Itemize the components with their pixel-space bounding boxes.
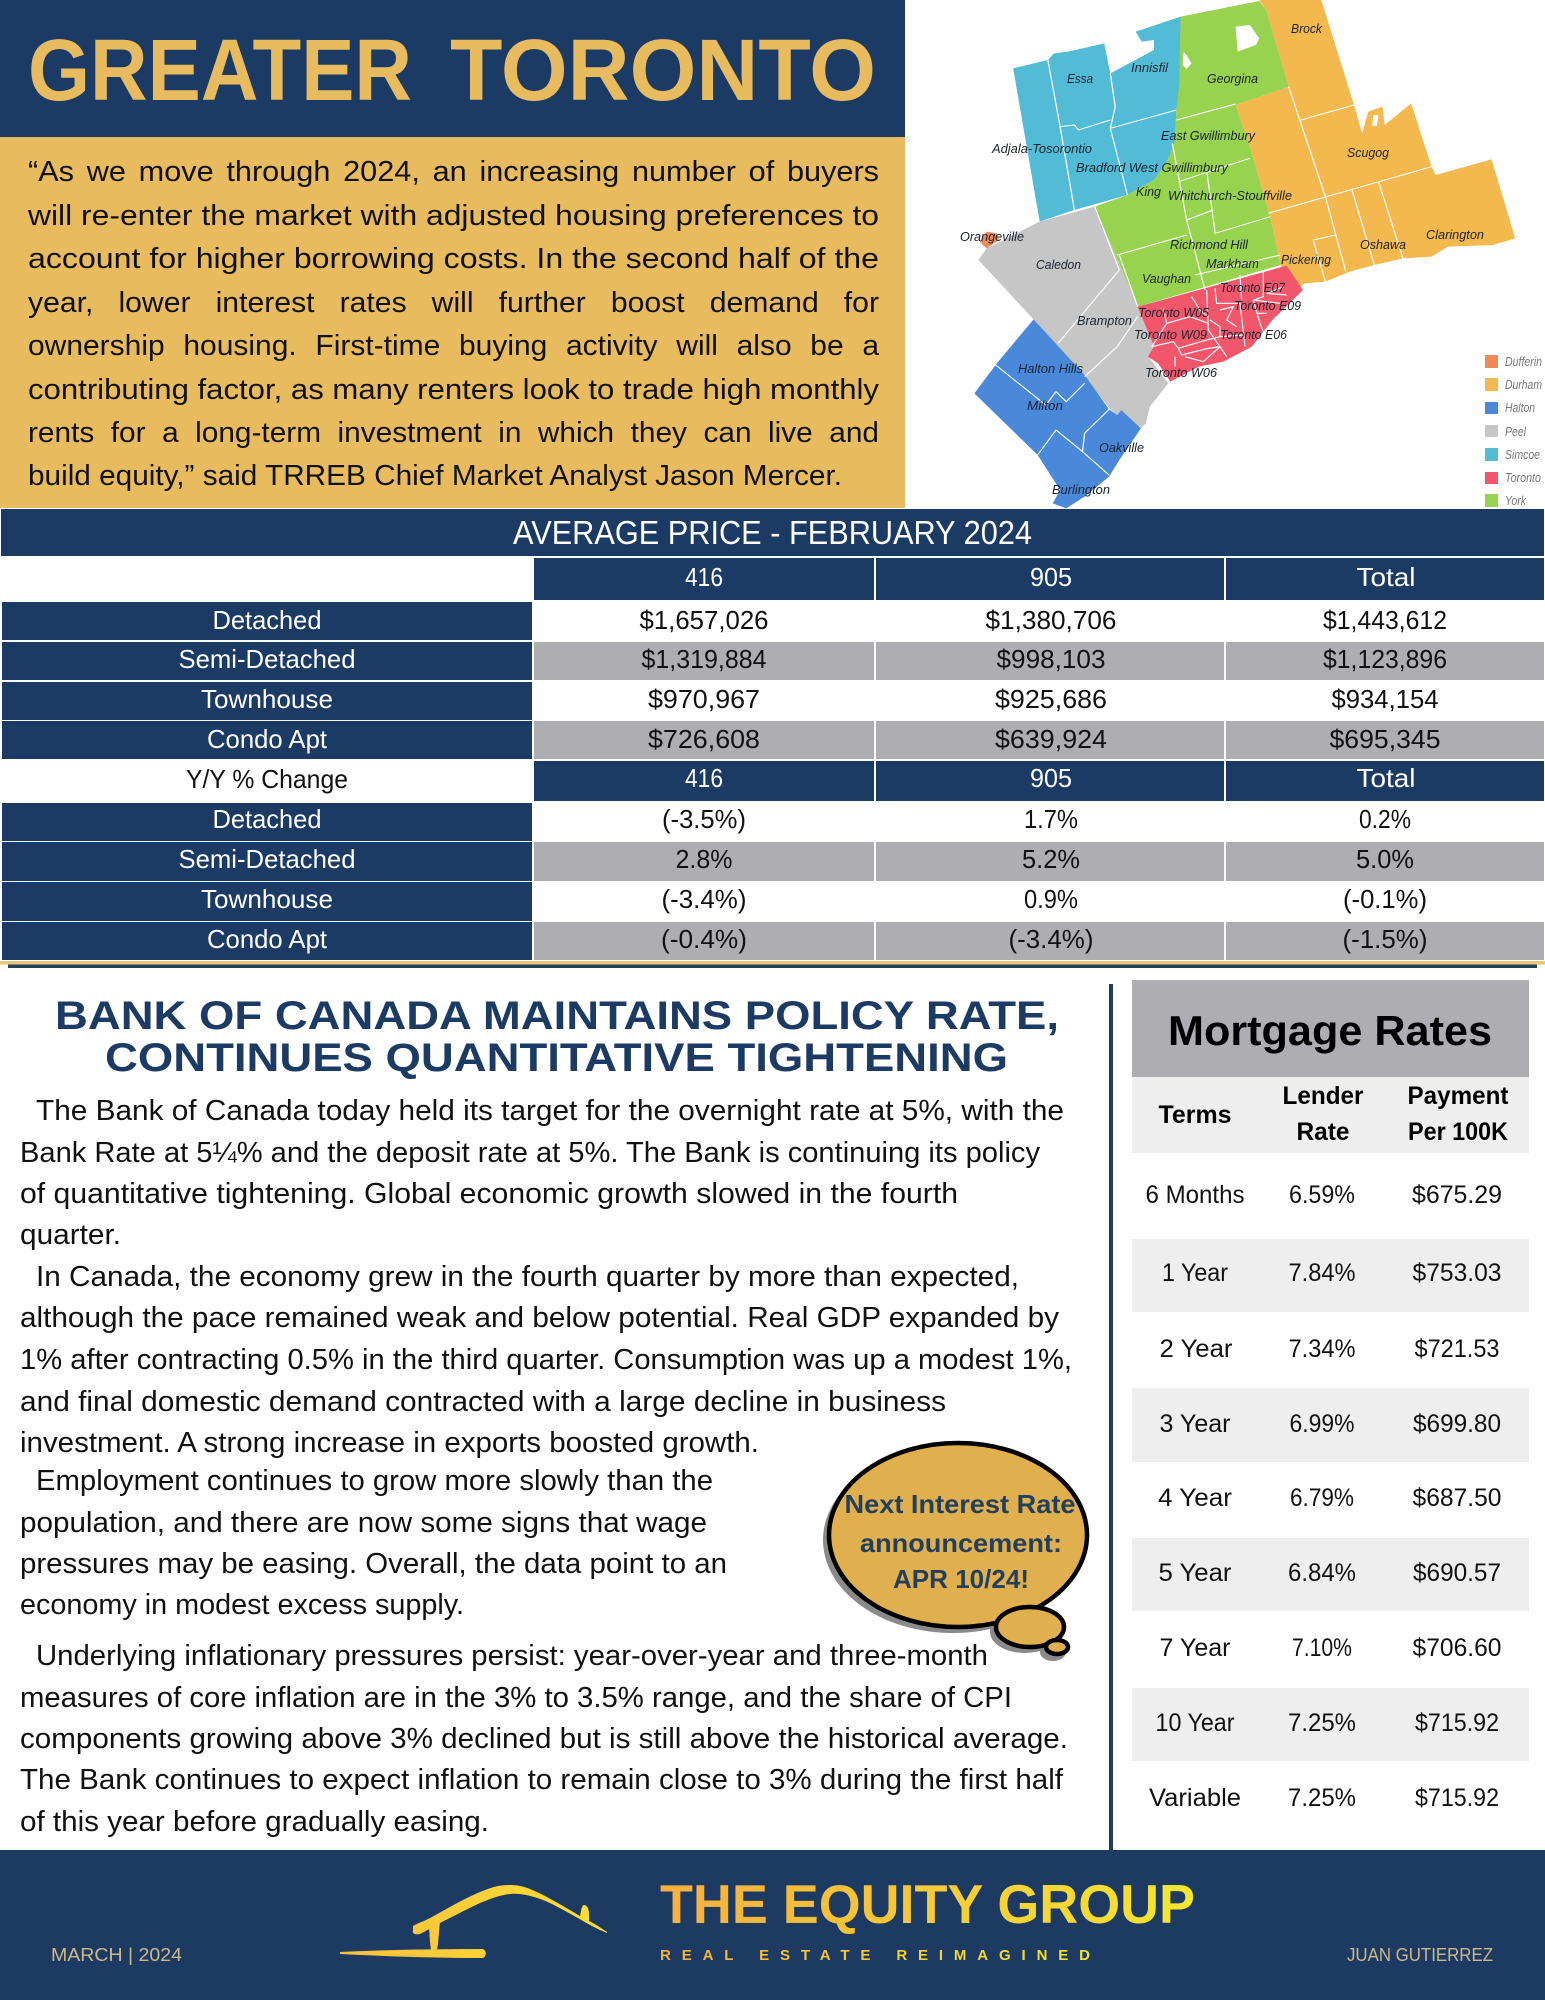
text block: Bank of Canada article: Bank Rate at 5¼% and the deposit rate at 5%. The Bank is continuing its policy bbox=[20, 1137, 1040, 1169]
price rows: $639,924 bbox=[995, 724, 1107, 754]
map: GTA regions: Pickering bbox=[1281, 252, 1332, 267]
text block: Bank of Canada article: Employment continues to grow more slowly than the bbox=[36, 1465, 713, 1497]
price rows: $1,123,896 bbox=[1323, 644, 1447, 674]
panel: market analyst quote: year, lower interest rates will further boost demand for bbox=[28, 287, 879, 319]
mortgage rate rows: 6.59% bbox=[1289, 1181, 1355, 1209]
year over year rows: 0.2% bbox=[1359, 804, 1411, 834]
mortgage rate rows: $706.60 bbox=[1412, 1634, 1502, 1662]
map: GTA regions bbox=[960, 0, 1515, 508]
callout: next interest rate announcement: APR 10/24! bbox=[893, 1564, 1029, 1594]
mortgage rate rows: $753.03 bbox=[1412, 1259, 1502, 1287]
map: GTA regions: Toronto E07 bbox=[1220, 280, 1286, 295]
panel: market analyst quote: account for higher borrowing costs. In the second half of the bbox=[28, 243, 879, 275]
map: GTA regions: East Gwillimbury bbox=[1161, 128, 1256, 143]
year over year rows: 1.7% bbox=[1024, 804, 1078, 834]
text block: Bank of Canada article: and final domestic demand contracted with a large decline in business bbox=[20, 1386, 946, 1418]
mortgage rate rows: 6 Months bbox=[1146, 1181, 1244, 1209]
map legend: Halton bbox=[1505, 400, 1535, 415]
map legend: Peel bbox=[1505, 424, 1527, 439]
year over year rows: (-3.5%) bbox=[662, 804, 746, 834]
map: GTA regions: Caledon bbox=[1036, 257, 1081, 272]
icon: equity group house logo bbox=[340, 1885, 607, 1958]
price rows: $998,103 bbox=[996, 644, 1106, 674]
mortgage rate rows: 6.79% bbox=[1290, 1484, 1354, 1512]
table title bbox=[1, 509, 1544, 556]
heading: Bank of Canada bbox=[55, 994, 1059, 1080]
map legend: York bbox=[1505, 493, 1527, 508]
text block: Bank of Canada article: of this year before gradually easing. bbox=[20, 1806, 489, 1838]
year over year rows: 5.2% bbox=[1022, 844, 1080, 874]
text block: Bank of Canada article: Underlying inflationary pressures persist: year-over-year and three-month bbox=[36, 1640, 988, 1672]
column headers: year over year: 416 bbox=[685, 763, 723, 793]
map: GTA regions: Brampton bbox=[1077, 313, 1132, 328]
map: GTA regions: Burlington bbox=[1052, 482, 1110, 497]
text block: Bank of Canada article: measures of core inflation are in the 3% to 3.5% range, and the share of CPI bbox=[20, 1682, 1012, 1714]
mortgage rate rows: 7 Year bbox=[1160, 1634, 1230, 1662]
price rows: $695,345 bbox=[1330, 724, 1440, 754]
text block: Bank of Canada article: pressures may be easing. Overall, the data point to an bbox=[20, 1548, 727, 1580]
mortgage rate rows: $675.29 bbox=[1412, 1181, 1502, 1209]
year over year rows bbox=[2, 803, 1544, 960]
year over year rows: Condo Apt bbox=[207, 924, 328, 954]
year over year rows: (-0.4%) bbox=[661, 924, 747, 954]
column headers: year over year: 905 bbox=[1030, 763, 1072, 793]
text block: Bank of Canada article: In Canada, the economy grew in the fourth quarter by more than expected, bbox=[36, 1261, 1019, 1293]
year over year rows: Townhouse bbox=[201, 884, 333, 914]
mortgage rate rows: 7.34% bbox=[1288, 1335, 1356, 1363]
year over year rows: (-1.5%) bbox=[1342, 924, 1428, 954]
price rows bbox=[2, 602, 1544, 759]
panel: market analyst quote: ownership housing. First-time buying activity will also be a bbox=[28, 330, 880, 362]
heading: Bank of Canada: BANK OF CANADA MAINTAINS POLICY RATE, bbox=[55, 994, 1059, 1038]
year over year rows: 5.0% bbox=[1356, 844, 1414, 874]
column headers: year over year: Y/Y % Change bbox=[186, 764, 348, 794]
panel: market analyst quote: build equity,” said TRREB Chief Market Analyst Jason Mercer. bbox=[28, 460, 842, 492]
map: GTA regions: Adjala-Tosorontio bbox=[991, 141, 1092, 156]
map: GTA regions: Richmond Hill bbox=[1170, 237, 1249, 252]
map: GTA regions: Bradford West Gwillimbury bbox=[1076, 160, 1229, 175]
column headers: year over year: Total bbox=[1356, 763, 1416, 793]
mortgage column headers bbox=[1132, 1077, 1529, 1153]
text block: Bank of Canada article: 1% after contracting 0.5% in the third quarter. Consumption was up a modest 1%, bbox=[20, 1344, 1072, 1376]
mortgage column headers: Lender bbox=[1282, 1082, 1364, 1110]
mortgage rate rows: 7.25% bbox=[1288, 1784, 1356, 1812]
map: GTA regions: Clarington bbox=[1426, 227, 1484, 242]
column headers: price bbox=[534, 558, 1544, 600]
mortgage rate rows: $721.53 bbox=[1414, 1335, 1500, 1363]
column headers: year over year bbox=[186, 761, 1544, 801]
company name: THE EQUITY GROUP bbox=[660, 1873, 1195, 1935]
mortgage column headers: Rate bbox=[1296, 1118, 1350, 1146]
mortgage rate rows: $690.57 bbox=[1413, 1559, 1501, 1587]
map: GTA regions: Toronto E06 bbox=[1220, 327, 1288, 342]
map legend bbox=[1485, 354, 1542, 508]
mortgage rate rows: 6.99% bbox=[1290, 1410, 1354, 1438]
mortgage rate rows: 5 Year bbox=[1158, 1559, 1232, 1587]
map: GTA regions: Milton bbox=[1027, 398, 1063, 413]
map: GTA regions: Toronto W06 bbox=[1145, 365, 1218, 380]
price rows: Semi-Detached bbox=[178, 644, 356, 674]
price rows: $934,154 bbox=[1332, 684, 1438, 714]
year over year rows: 2.8% bbox=[676, 844, 732, 874]
text block: Bank of Canada article: population, and there are now some signs that wage bbox=[20, 1507, 707, 1539]
mortgage column headers: Terms bbox=[1158, 1101, 1232, 1129]
year over year rows: Semi-Detached bbox=[178, 844, 356, 874]
footer author: JUAN GUTIERREZ bbox=[1347, 1945, 1493, 1965]
price rows: Detached bbox=[212, 605, 322, 635]
text block: Bank of Canada article: components growing above 3% declined but is still above the historical average. bbox=[20, 1723, 1068, 1755]
map: GTA regions: Orangeville bbox=[960, 229, 1024, 244]
text block: Bank of Canada article bbox=[20, 1095, 1072, 1838]
mortgage rate rows: 4 Year bbox=[1158, 1484, 1232, 1512]
mortgage rate rows: 7.84% bbox=[1288, 1259, 1356, 1287]
mortgage rate rows: 1 Year bbox=[1162, 1259, 1228, 1287]
map: GTA regions: Essa bbox=[1067, 71, 1093, 86]
map: GTA regions: Whitchurch-Stouffville bbox=[1168, 188, 1292, 203]
company tagline: REAL ESTATE REIMAGINED bbox=[660, 1947, 1090, 1964]
text block: Bank of Canada article: although the pace remained weak and below potential. Real GDP expanded by bbox=[20, 1302, 1060, 1334]
mortgage rate rows: $699.80 bbox=[1413, 1410, 1501, 1438]
column headers: price: 416 bbox=[685, 562, 723, 592]
mortgage rate rows: $715.92 bbox=[1415, 1784, 1499, 1812]
year over year rows: (-0.1%) bbox=[1343, 884, 1427, 914]
text block: Bank of Canada article: investment. A strong increase in exports boosted growth. bbox=[20, 1427, 759, 1459]
map: GTA regions: Scugog bbox=[1347, 145, 1390, 160]
mortgage rates heading bbox=[1132, 980, 1529, 1077]
mortgage column headers: Per 100K bbox=[1408, 1118, 1508, 1146]
title banner: TORONTO bbox=[450, 22, 876, 119]
year over year rows: (-3.4%) bbox=[1008, 924, 1094, 954]
price rows: $970,967 bbox=[648, 684, 760, 714]
text block: Bank of Canada article: quarter. bbox=[20, 1219, 121, 1251]
map: GTA regions: Brock bbox=[1291, 21, 1323, 36]
price rows: Townhouse bbox=[201, 684, 333, 714]
map: GTA regions: Toronto W05 bbox=[1138, 305, 1210, 320]
column headers: price: 905 bbox=[1030, 562, 1072, 592]
price rows: $1,319,884 bbox=[642, 644, 766, 674]
mortgage rate rows: 7.10% bbox=[1292, 1634, 1352, 1662]
price rows: $1,657,026 bbox=[640, 605, 768, 635]
map: GTA regions: Innisfil bbox=[1131, 60, 1169, 75]
panel: market analyst quote bbox=[0, 137, 905, 508]
text block: Bank of Canada article: The Bank of Canada today held its target for the overnight rate at 5%, with the bbox=[36, 1095, 1064, 1127]
panel: market analyst quote: “As we move through 2024, an increasing number of buyers bbox=[28, 156, 879, 188]
mortgage rate rows: 7.25% bbox=[1288, 1709, 1356, 1737]
title banner bbox=[0, 0, 905, 137]
heading: Bank of Canada: CONTINUES QUANTITATIVE TIGHTENING bbox=[105, 1036, 1008, 1080]
text block: Bank of Canada article: economy in modest excess supply. bbox=[20, 1589, 464, 1621]
map: GTA regions: Toronto W09 bbox=[1134, 327, 1207, 342]
mortgage rate rows: $715.92 bbox=[1415, 1709, 1499, 1737]
mortgage rate rows: 3 Year bbox=[1160, 1410, 1230, 1438]
map: GTA regions: Oshawa bbox=[1360, 237, 1406, 252]
price rows: $1,443,612 bbox=[1323, 605, 1447, 635]
map: GTA regions: Vaughan bbox=[1142, 271, 1191, 286]
text block: Bank of Canada article: The Bank continues to expect inflation to remain close to 3% during the first half bbox=[20, 1764, 1064, 1796]
column headers: price: Total bbox=[1356, 562, 1416, 592]
map: GTA regions: Oakville bbox=[1099, 440, 1144, 455]
map: GTA regions: Toronto E09 bbox=[1234, 298, 1301, 313]
footer date: MARCH | 2024 bbox=[51, 1945, 182, 1965]
panel: market analyst quote: will re-enter the market with adjusted housing preferences to bbox=[27, 200, 879, 232]
callout: next interest rate announcement: Next Interest Rate bbox=[844, 1489, 1076, 1519]
panel: market analyst quote: rents for a long-term investment in which they can live and bbox=[28, 417, 879, 449]
price rows: Condo Apt bbox=[207, 724, 328, 754]
year over year rows: (-3.4%) bbox=[662, 884, 746, 914]
year over year rows: Detached bbox=[212, 804, 322, 834]
table: average price and year over year change bbox=[1, 509, 1544, 960]
mortgage rate rows: 2 Year bbox=[1160, 1335, 1232, 1363]
mortgage rates heading: Mortgage Rates bbox=[1168, 1007, 1492, 1054]
callout: next interest rate announcement: announcement: bbox=[860, 1528, 1062, 1558]
mortgage column headers: Payment bbox=[1408, 1082, 1509, 1110]
mortgage rate rows bbox=[1132, 1181, 1529, 1812]
map: GTA regions: Georgina bbox=[1207, 71, 1258, 86]
title banner: GREATER bbox=[28, 22, 412, 119]
map: GTA regions: Halton Hills bbox=[1018, 361, 1083, 376]
price rows: $925,686 bbox=[995, 684, 1107, 714]
price rows: $1,380,706 bbox=[986, 605, 1116, 635]
panel: market analyst quote: contributing factor, as many renters look to trade high monthly bbox=[28, 374, 880, 406]
callout: next interest rate announcement bbox=[823, 1443, 1087, 1661]
year over year rows: 0.9% bbox=[1024, 884, 1078, 914]
table title: AVERAGE PRICE - FEBRUARY 2024 bbox=[513, 514, 1032, 551]
map: GTA regions: Markham bbox=[1206, 256, 1259, 271]
mortgage rate rows: 10 Year bbox=[1156, 1709, 1234, 1737]
mortgage rate rows: $687.50 bbox=[1412, 1484, 1502, 1512]
footer bbox=[0, 1850, 1545, 2000]
mortgage rate rows: Variable bbox=[1149, 1784, 1241, 1812]
price rows: $726,608 bbox=[648, 724, 760, 754]
map: GTA regions: King bbox=[1136, 184, 1162, 199]
mortgage rate rows: 6.84% bbox=[1288, 1559, 1356, 1587]
panel: mortgage rates bbox=[1132, 980, 1529, 1812]
text block: Bank of Canada article: of quantitative tightening. Global economic growth slowed in the fourth bbox=[20, 1178, 958, 1210]
